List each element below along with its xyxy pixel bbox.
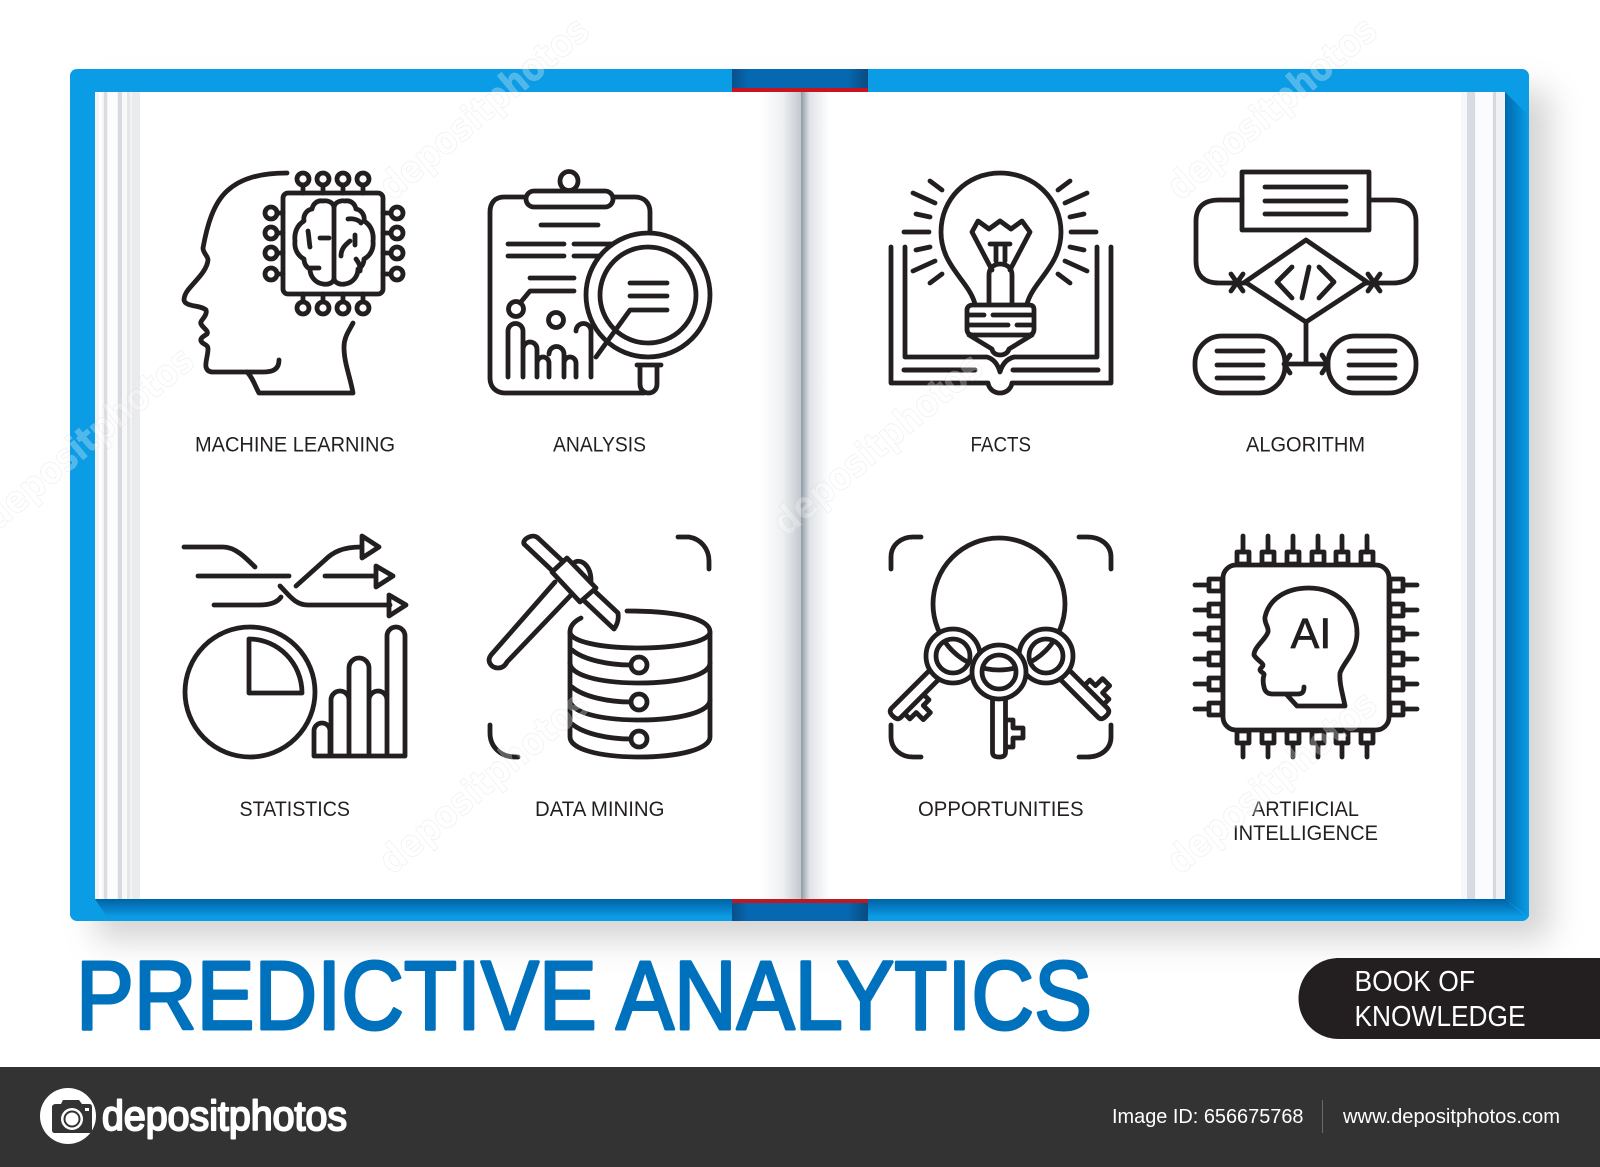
label: machine learning: MACHINE LEARNING (195, 434, 395, 456)
spine band top (732, 69, 868, 92)
badge: book of knowledge: KNOWLEDGE (1354, 1001, 1526, 1033)
icon: pickaxe and database (489, 536, 710, 757)
label: statistics: STATISTICS (240, 798, 350, 821)
label: artificial intelligence: ARTIFICIAL (1252, 798, 1359, 821)
icon: light bulb over open book (891, 173, 1111, 393)
website: www.depositphotos.com (1342, 1105, 1560, 1128)
watermarks: depositphotos (1158, 682, 1385, 882)
panel: artificial intelligence (1195, 536, 1417, 845)
label: analysis: ANALYSIS (553, 434, 646, 456)
watermarks: depositphotos (370, 682, 597, 882)
logo wordmark: depositphotos (102, 1092, 347, 1139)
icon: arrows, pie chart and bars (184, 536, 406, 757)
spine band bottom (732, 898, 868, 921)
badge: book of knowledge: BOOK OF (1354, 966, 1475, 998)
badge: book of knowledge (1298, 958, 1600, 1039)
left page (95, 92, 801, 899)
panel: data mining (489, 536, 710, 821)
label: opportunities: OPPORTUNITIES (918, 798, 1084, 821)
panel: opportunities (874, 537, 1125, 821)
icon: AI chip with head: AI (1291, 610, 1331, 658)
icon: AI chip with head (1195, 536, 1417, 757)
image id: Image ID: 656675768 (1112, 1105, 1304, 1128)
icon: clipboard with magnifier (490, 172, 710, 393)
book cover (70, 69, 1529, 921)
panel: analysis (490, 172, 710, 456)
icon: flowchart (1195, 172, 1416, 393)
watermarks (0, 8, 1385, 882)
label: artificial intelligence: INTELLIGENCE (1233, 822, 1378, 845)
icon: key ring (874, 537, 1125, 757)
panel: algorithm (1195, 172, 1416, 456)
icon: head with brain chip (184, 173, 403, 393)
icon: camera logo (40, 1088, 96, 1144)
title: PREDICTIVE ANALYTICS (76, 941, 1092, 1050)
book shadow (95, 90, 1550, 940)
right page (801, 92, 1505, 899)
watermarks: depositphotos (764, 344, 991, 544)
footer bar (0, 1067, 1600, 1167)
panel: facts (891, 173, 1111, 456)
panel: machine learning (184, 173, 403, 456)
label: facts: FACTS (970, 434, 1031, 456)
panel: statistics (184, 536, 406, 821)
label: data mining: DATA MINING (535, 798, 664, 821)
label: algorithm: ALGORITHM (1246, 434, 1365, 456)
panel: open book (70, 69, 1529, 921)
